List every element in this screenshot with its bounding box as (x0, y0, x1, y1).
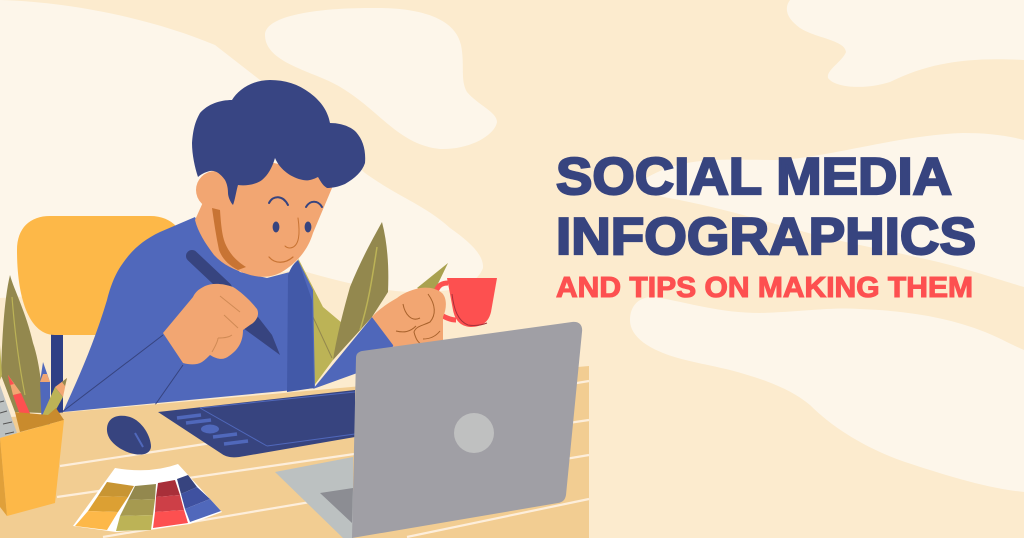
drawing tablet (158, 390, 355, 457)
right hand holding cup (372, 288, 446, 375)
mouse (107, 416, 151, 455)
title: SOCIAL MEDIA (556, 148, 952, 206)
face details (269, 197, 322, 262)
title (556, 148, 976, 304)
person: torso (62, 217, 395, 412)
colour palette swatches (73, 464, 222, 532)
drawing hand (163, 284, 258, 364)
plant leaves behind person (298, 222, 448, 387)
stylus pen (192, 256, 280, 355)
title: INFOGRAPHICS (556, 208, 976, 266)
person: head (192, 80, 365, 277)
chair (17, 216, 176, 415)
pen holder with pencils and leaf (0, 275, 67, 516)
laptop (275, 322, 582, 538)
table (0, 366, 589, 538)
title: AND TIPS ON MAKING THEM (556, 272, 973, 304)
laptop logo (454, 413, 494, 453)
coffee cup (436, 278, 497, 327)
hair (192, 80, 365, 205)
